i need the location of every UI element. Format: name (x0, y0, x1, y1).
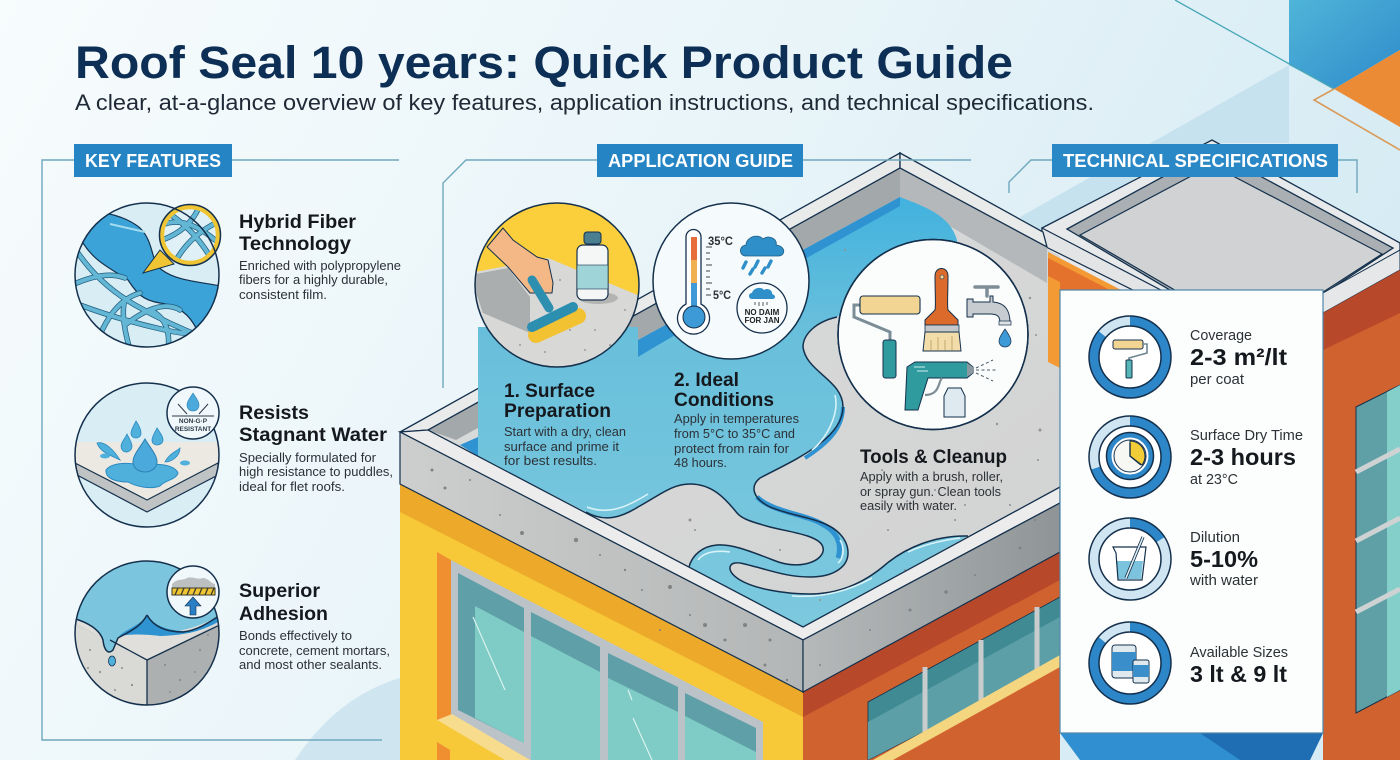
title: Roof Seal 10 years: Quick Product Guide (75, 37, 1013, 88)
icon: sizes (1089, 622, 1171, 704)
text: tools: Tools & Cleanup (860, 447, 1007, 468)
text: ideal conditions: Conditions (674, 390, 774, 411)
text: stagnant water: Resists (239, 403, 309, 424)
text: hybrid fiber: Technology (239, 234, 351, 255)
text: ideal conditions (674, 370, 799, 470)
icon: stagnant water: NON-G·P (179, 418, 208, 425)
icon: hybrid fiber (74, 202, 222, 348)
section frame: technical specifications (1009, 160, 1357, 193)
text: stagnant water: ideal for flet roofs. (239, 479, 345, 494)
panel: application guide (470, 203, 1028, 513)
text: dry time: Surface Dry Time (1190, 427, 1303, 444)
text: adhesion: concrete, cement mortars, (239, 643, 390, 658)
subtitle: A clear, at-a-glance overview of key features, application instructions, and technical specifications. (75, 90, 1094, 115)
icon: coverage (1089, 316, 1171, 398)
text: dilution: 5-10% (1190, 546, 1258, 572)
icon: dry time (1089, 416, 1171, 498)
text: ideal conditions: protect from rain for (674, 441, 790, 456)
panel: key features (60, 203, 401, 710)
text: dry time: at 23°C (1190, 471, 1238, 488)
text: surface preparation: for best results. (504, 453, 597, 468)
text: adhesion: and most other sealants. (239, 657, 382, 672)
blue roof sealant fluid (460, 197, 968, 627)
icon: ideal conditions: 5°C (713, 288, 731, 302)
icon: ideal conditions: 35°C (708, 234, 733, 248)
decorative lower left wave (295, 678, 400, 760)
text: stagnant water: high resistance to puddles, (239, 464, 393, 479)
text: hybrid fiber: Hybrid Fiber (239, 212, 357, 233)
heading: key features: KEY FEATURES (85, 151, 221, 171)
text: dilution: Dilution (1190, 529, 1240, 546)
heading: key features (74, 144, 232, 177)
top right corner graphic (1175, 0, 1400, 150)
main building orange wall (803, 552, 1060, 760)
icon: dilution (1089, 518, 1171, 600)
text: surface preparation: 1. Surface (504, 381, 595, 402)
section frame: application guide (443, 160, 971, 388)
text: stagnant water (239, 403, 393, 494)
text: hybrid fiber: consistent film. (239, 287, 327, 302)
text: ideal conditions: 48 hours. (674, 455, 727, 470)
text: stagnant water: Stagnant Water (239, 425, 388, 446)
heading: technical specifications (1052, 144, 1338, 177)
heading: technical specifications: TECHNICAL SPECIFICATIONS (1063, 151, 1328, 171)
text: surface preparation: Preparation (504, 401, 611, 422)
icon: surface preparation (470, 203, 640, 370)
decorative pale triangle (1020, 65, 1289, 240)
icon: ideal conditions (653, 203, 809, 359)
text: hybrid fiber: Enriched with polypropylene (239, 258, 401, 273)
text: adhesion: Bonds effectively to (239, 628, 352, 643)
concrete speckles on parapet (430, 468, 1036, 681)
text: tools (860, 447, 1007, 513)
concrete speckles on roof floor (624, 249, 1042, 601)
text: adhesion: Adhesion (239, 604, 328, 625)
icon: tools (838, 240, 1028, 430)
text: tools: or spray gun. Clean tools (860, 484, 1001, 499)
text: adhesion (239, 581, 390, 672)
orange column (1048, 252, 1125, 368)
main building yellow wall (400, 484, 803, 760)
text: surface preparation: surface and prime it (504, 439, 619, 454)
text: coverage: Coverage (1190, 327, 1252, 344)
text: ideal conditions: Apply in temperatures (674, 411, 799, 426)
icon: stagnant water (70, 383, 222, 527)
text: sizes: 3 lt & 9 lt (1190, 661, 1287, 687)
text: adhesion: Superior (239, 581, 321, 602)
icon: ideal conditions: FOR JAN (744, 316, 780, 325)
heading: application guide (597, 144, 803, 177)
panel: technical specifications (1060, 290, 1323, 733)
heading: application guide: APPLICATION GUIDE (608, 151, 793, 171)
text: coverage: per coat (1190, 371, 1245, 388)
text: tools: Apply with a brush, roller, (860, 469, 1003, 484)
text: sizes: Available Sizes (1190, 644, 1288, 661)
text: ideal conditions: 2. Ideal (674, 370, 739, 391)
parapet front (400, 430, 1060, 692)
text: stagnant water: Specially formulated for (239, 450, 377, 465)
text: coverage (1190, 327, 1287, 388)
rear building rooftop (1042, 140, 1400, 420)
text: hybrid fiber (239, 212, 401, 302)
text: tools: easily with water. (860, 498, 957, 513)
text: sizes (1190, 644, 1288, 687)
text: dilution: with water (1189, 572, 1258, 589)
text: dry time: 2-3 hours (1190, 444, 1296, 470)
section frame: key features (42, 160, 399, 740)
roof floor (428, 168, 1060, 627)
icon: ideal conditions: NO DAIM (745, 308, 780, 317)
icon: stagnant water: RESISTANT (175, 426, 211, 433)
text: coverage: 2-3 m²/lt (1190, 344, 1287, 370)
text: surface preparation: Start with a dry, clean (504, 424, 626, 439)
text: dry time (1190, 427, 1303, 488)
icon: adhesion (74, 560, 220, 706)
text: hybrid fiber: fibers for a highly durable, (239, 272, 388, 287)
parapet walls rear (400, 153, 1047, 440)
rear building right wall (1323, 250, 1400, 760)
text: surface preparation (504, 381, 626, 468)
panel pennant (1060, 733, 1323, 760)
text: ideal conditions: from 5°C to 35°C and (674, 426, 795, 441)
text: dilution (1189, 529, 1258, 589)
left windows (437, 552, 763, 760)
